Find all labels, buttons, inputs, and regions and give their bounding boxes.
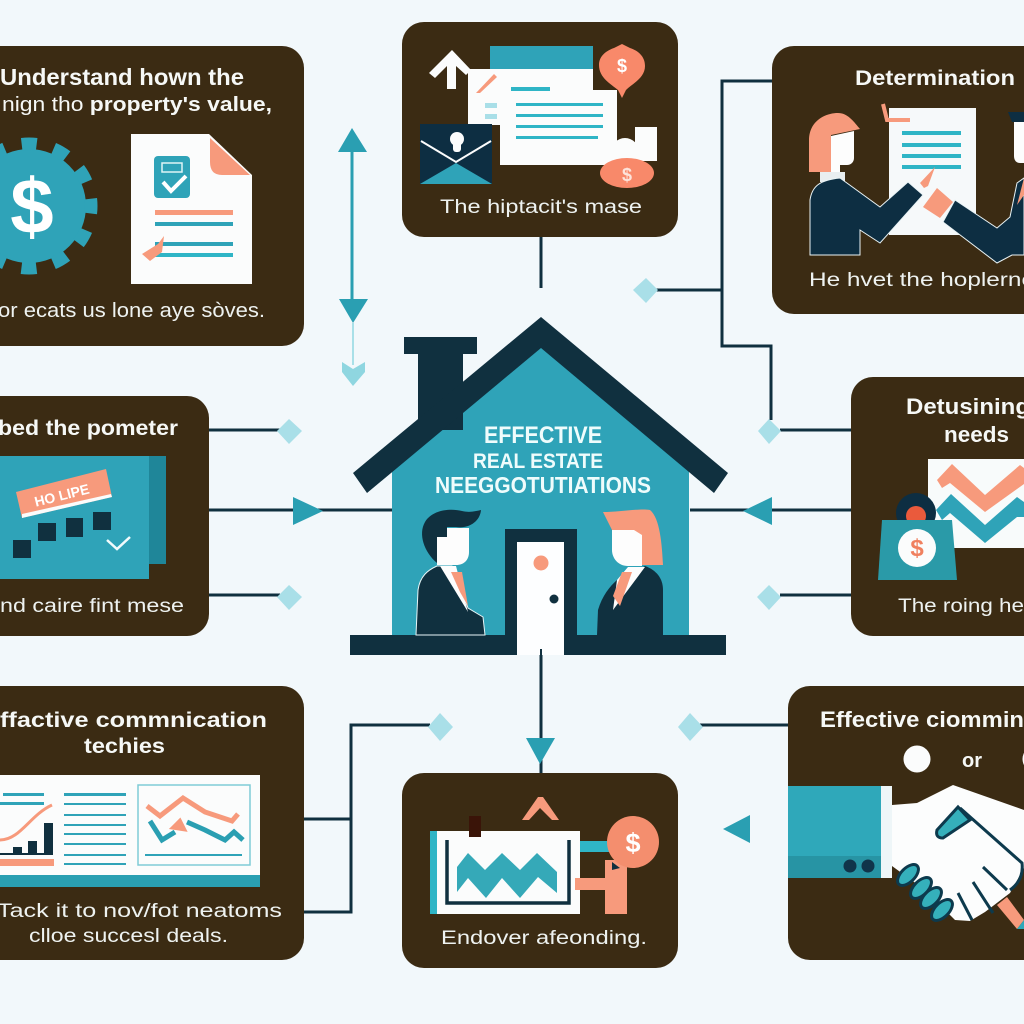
icon: money bag with box	[600, 127, 657, 188]
panel caption: The hiptacit's mase	[440, 197, 642, 218]
panel caption: or ecats us lone aye sòves.	[0, 300, 265, 322]
panel heading	[0, 64, 272, 116]
icon: documents	[468, 46, 617, 165]
panel: handshake	[788, 686, 1024, 960]
document	[883, 104, 976, 235]
icon: handshake	[788, 785, 1024, 929]
chimney	[404, 337, 477, 430]
bullet with or	[904, 746, 1024, 772]
panel caption: The roing he	[898, 596, 1024, 617]
panel caption	[0, 901, 282, 947]
roof	[353, 317, 728, 493]
panel: top center	[402, 22, 678, 237]
icon: money bag with box: $	[622, 165, 632, 185]
panel heading: bed the pometer	[0, 417, 178, 440]
house body	[392, 345, 689, 636]
connector lines	[208, 81, 852, 912]
house title: REAL ESTATE	[473, 450, 603, 473]
door	[505, 529, 577, 655]
foundation	[350, 635, 726, 655]
panel heading: Understand hown the	[0, 64, 244, 90]
icon: document	[131, 134, 252, 284]
house title	[435, 422, 651, 498]
icon: envelope with keyhole	[420, 124, 492, 184]
panel caption: clloe succesl deals.	[29, 926, 228, 947]
panel heading: nign tho property's value,	[2, 94, 272, 116]
panel heading: Effective ciommin	[820, 707, 1024, 732]
panel: pointer	[0, 396, 209, 636]
arrow markers	[277, 128, 781, 843]
right agent	[597, 509, 663, 635]
panel: determination	[772, 46, 1024, 314]
left person	[809, 113, 923, 255]
panel caption: He hvet the hoplerne	[809, 270, 1024, 291]
house title: NEEGGOTUTIATIONS	[435, 472, 651, 498]
icon: shopping bag: $	[910, 535, 924, 562]
panel: bottom center	[402, 773, 678, 968]
chart card	[430, 816, 580, 914]
icon: shopping bag	[878, 493, 957, 580]
panel caption: Endover afeonding.	[441, 928, 647, 949]
panel caption: Tack it to nov/fot neatoms	[0, 901, 282, 922]
panel: needs	[851, 377, 1024, 636]
central house illustration	[350, 317, 728, 655]
icon: dollar pin: $	[617, 56, 627, 76]
icon: chevron	[522, 797, 559, 820]
board illustration: HO LIPE	[33, 481, 91, 510]
left agent	[416, 510, 485, 635]
panel heading	[0, 709, 267, 758]
chart card	[0, 775, 260, 887]
panel heading: Determination	[855, 67, 1015, 90]
icon: dollar pin	[599, 44, 645, 98]
bullet with or: or	[962, 750, 982, 772]
house title: EFFECTIVE	[484, 422, 602, 449]
panel heading: techies	[84, 735, 165, 758]
icon: coin and bracket: $	[625, 828, 641, 858]
panel: communication techniques	[0, 686, 304, 960]
panel: property value	[0, 46, 304, 346]
panel heading: needs	[944, 422, 1009, 447]
panel heading: ffactive commnication	[0, 709, 267, 732]
icon: dollar gear: $	[10, 162, 54, 250]
right person	[923, 112, 1024, 263]
board illustration	[0, 456, 166, 579]
icon: up arrow	[429, 50, 471, 89]
icon: coin and bracket	[575, 816, 659, 914]
panel heading: Detusining	[906, 394, 1024, 419]
panel heading	[906, 394, 1024, 447]
panel caption: nd caire fint mese	[0, 596, 184, 617]
icon: dollar gear	[0, 144, 91, 268]
chart card	[928, 459, 1024, 548]
